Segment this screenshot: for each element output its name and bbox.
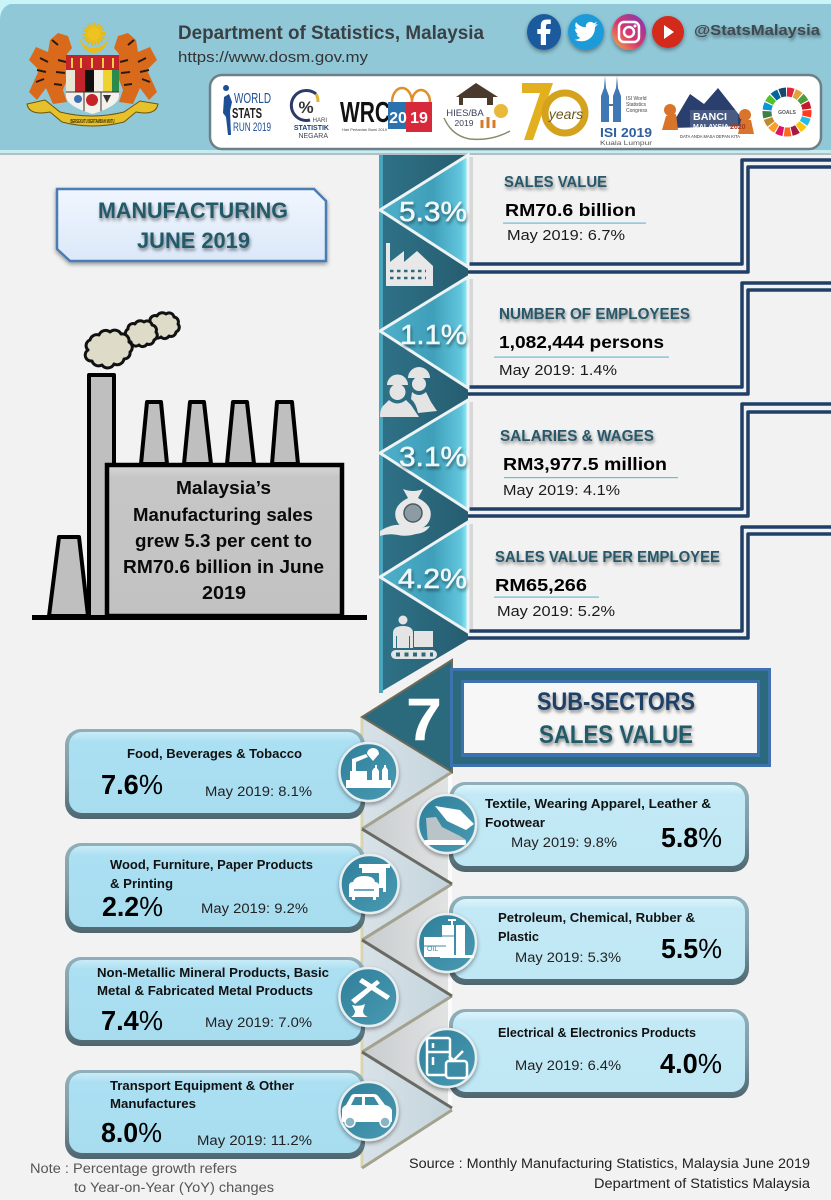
card: food, beverages and tobacco bbox=[65, 729, 365, 819]
icon: fridge and television bbox=[418, 1029, 476, 1087]
icon: star and crescent bbox=[79, 25, 109, 53]
icon: youtube bbox=[652, 16, 684, 48]
card: transport equipment and other manufactures: May 2019: 11.2% bbox=[197, 1133, 312, 1148]
logo: isi 2019: Congress bbox=[626, 108, 648, 114]
card: petroleum, chemical, rubber and plastic: Petroleum, Chemical, Rubber & bbox=[498, 911, 695, 925]
note: Note : Percentage growth refers bbox=[30, 1161, 237, 1176]
card: wood, furniture, paper products and printing: May 2019: 9.2% bbox=[201, 901, 308, 916]
card: non-metallic mineral and metal products: Non-Metallic Mineral Products, Basic bbox=[97, 966, 329, 980]
panel: factory building with summary bbox=[107, 465, 342, 616]
logo: world stats run: STATS bbox=[232, 105, 262, 122]
logo: isi 2019: Kuala Lumpur bbox=[600, 141, 652, 147]
icon: left tiger bbox=[29, 33, 72, 104]
indicator: sales value: RM70.6 billion bbox=[505, 200, 636, 220]
logo: hies/ba 2019 bbox=[444, 83, 510, 139]
card: wood, furniture, paper products and printing: & Printing bbox=[110, 877, 173, 891]
indicator: sales value: SALES VALUE bbox=[504, 174, 607, 191]
note bbox=[30, 1161, 274, 1195]
indicator: sales value: May 2019: 6.7% bbox=[507, 228, 625, 244]
value: 3.1%: 3.1% bbox=[399, 441, 467, 472]
icon: sneakers bbox=[418, 795, 476, 853]
icon: instagram bbox=[612, 14, 646, 50]
card: transport equipment and other manufactures: Manufactures bbox=[110, 1097, 196, 1111]
icon: money bag in hand bbox=[380, 489, 431, 536]
ground line bbox=[32, 615, 367, 620]
card: textile, wearing apparel, leather and footwear bbox=[449, 782, 749, 872]
card: non-metallic mineral and metal products bbox=[65, 957, 365, 1046]
logo: hies/ba 2019: 2019 bbox=[455, 118, 474, 128]
indicator: sales value bbox=[503, 174, 646, 244]
icon: car bbox=[340, 1082, 398, 1140]
logo: banci malaysia 2020: MALAYSIA bbox=[693, 124, 729, 131]
title: manufacturing june 2019 bbox=[57, 189, 326, 261]
ribbon: key indicators bbox=[379, 155, 473, 716]
panel: partner logos bbox=[210, 75, 821, 149]
logo: hari statistik negara: STATISTIK bbox=[294, 125, 329, 132]
chimneys bbox=[49, 375, 298, 617]
card: electrical and electronics products: Electrical & Electronics Products bbox=[498, 1026, 696, 1040]
logo: banci malaysia 2020 bbox=[662, 88, 754, 139]
social handle: @StatsMalaysia bbox=[694, 22, 821, 39]
logo: banci malaysia 2020: DATA ANDA MASA DEPAN KITA bbox=[680, 134, 740, 139]
icon: metal products bbox=[340, 968, 398, 1026]
ribbon facet: employees bbox=[380, 277, 468, 388]
card: wood, furniture, paper products and printing bbox=[65, 843, 365, 933]
icon: furniture bbox=[340, 855, 398, 913]
value: 5.3%: 5.3% bbox=[399, 196, 467, 227]
ribbon facet: sales per employee bbox=[380, 522, 468, 632]
logo: isi 2019: Statistics bbox=[626, 102, 647, 108]
indicator: salaries and wages: May 2019: 4.1% bbox=[503, 483, 620, 499]
ribbon facet: salaries bbox=[380, 400, 468, 510]
icon: motto scroll: BERSEKUTU BERTAMBAH MUTU bbox=[70, 119, 115, 125]
value: 4.2%: 4.2% bbox=[398, 563, 467, 594]
card: electrical and electronics products: May 2019: 6.4% bbox=[515, 1058, 621, 1073]
icon: national coat of arms bbox=[27, 25, 158, 126]
card: petroleum, chemical, rubber and plastic bbox=[449, 896, 749, 985]
summary text: RM70.6 billion in June bbox=[123, 556, 324, 577]
shadows beside ribbon bbox=[468, 157, 473, 629]
card: transport equipment and other manufactures: 8.0% bbox=[101, 1117, 162, 1148]
logo: hies/ba 2019: HIES/BA bbox=[446, 108, 484, 119]
note: to Year-on-Year (YoY) changes bbox=[74, 1180, 274, 1195]
source: Department of Statistics Malaysia bbox=[594, 1176, 811, 1191]
logo: world stats run bbox=[223, 85, 271, 135]
logo: wrc 2019 bbox=[340, 88, 432, 132]
icon: oil barrels: OIL bbox=[427, 946, 438, 953]
source bbox=[409, 1156, 811, 1191]
indicator: sales value per employee: RM65,266 bbox=[495, 575, 587, 595]
lower zigzag ribbon bbox=[362, 717, 452, 1168]
logo: 70 years: years bbox=[548, 106, 583, 122]
card: petroleum, chemical, rubber and plastic: May 2019: 5.3% bbox=[515, 950, 621, 965]
icon: factory bbox=[386, 243, 433, 286]
card: non-metallic mineral and metal products: Metal & Fabricated Metal Products bbox=[97, 984, 313, 998]
logo: world stats run: RUN 2019 bbox=[233, 120, 271, 134]
indicator: number of employees: 1,082,444 persons bbox=[499, 332, 664, 352]
panel: sub-sectors sales value heading bbox=[450, 668, 771, 767]
summary text: grew 5.3 per cent to bbox=[135, 530, 312, 551]
value: 1.1%: 1.1% bbox=[400, 319, 467, 350]
logo: world stats run: WORLD bbox=[234, 90, 271, 107]
card: textile, wearing apparel, leather and footwear: Textile, Wearing Apparel, Leather & bbox=[485, 797, 711, 811]
logo: banci malaysia 2020: 2020 bbox=[730, 124, 746, 131]
logo: wrc 2019: 19 bbox=[410, 110, 428, 127]
ribbon gap under last segment bbox=[379, 640, 468, 716]
logo: hari statistik negara: % bbox=[298, 98, 314, 117]
connector lines bbox=[468, 160, 831, 638]
logo: wrc 2019: 20 bbox=[389, 110, 407, 127]
logo: 70 years bbox=[522, 83, 585, 140]
card: non-metallic mineral and metal products: May 2019: 7.0% bbox=[205, 1015, 312, 1030]
indicator: number of employees bbox=[494, 306, 690, 379]
card: electrical and electronics products bbox=[449, 1009, 749, 1098]
seven sub-sectors badge bbox=[362, 660, 452, 772]
title: manufacturing june 2019: JUNE 2019 bbox=[137, 228, 250, 253]
logo: hari statistik negara: NEGARA bbox=[298, 133, 328, 140]
icon: food production bbox=[340, 743, 398, 801]
factory illustration bbox=[32, 313, 367, 620]
header band bbox=[0, 0, 831, 155]
card: petroleum, chemical, rubber and plastic: 5.5% bbox=[661, 933, 722, 964]
card: food, beverages and tobacco: May 2019: 8.1% bbox=[205, 784, 312, 799]
card: textile, wearing apparel, leather and footwear: May 2019: 9.8% bbox=[511, 835, 617, 850]
indicator: sales value per employee bbox=[494, 549, 720, 620]
logo: isi 2019: ISI World bbox=[626, 96, 647, 102]
summary text: 2019 bbox=[202, 582, 246, 603]
logo: hari statistik negara: HARI bbox=[313, 118, 327, 124]
logo: isi 2019: ISI 2019 bbox=[600, 125, 652, 140]
summary text bbox=[123, 477, 324, 603]
summary text: Manufacturing sales bbox=[133, 504, 313, 525]
logo: hari statistik negara bbox=[291, 90, 329, 140]
indicator: salaries and wages: SALARIES & WAGES bbox=[500, 428, 654, 445]
logo: wrc 2019: Hari Pertanian Bumi 2019 bbox=[342, 127, 388, 132]
website url: https://www.dosm.gov.my bbox=[178, 49, 369, 66]
logo: sustainable development goals wheel bbox=[767, 92, 807, 132]
logo: banci malaysia 2020: BANCI bbox=[693, 112, 727, 123]
header title: Department of Statistics, Malaysia bbox=[178, 23, 484, 44]
card: textile, wearing apparel, leather and footwear: 5.8% bbox=[661, 822, 722, 853]
title: manufacturing june 2019: MANUFACTURING bbox=[98, 198, 288, 223]
icon: oil barrels bbox=[418, 914, 476, 972]
card: transport equipment and other manufactures bbox=[65, 1070, 365, 1159]
card: food, beverages and tobacco: Food, Beverages & Tobacco bbox=[127, 747, 302, 761]
source: Source : Monthly Manufacturing Statistics, Malaysia June 2019 bbox=[409, 1156, 810, 1171]
panel: sub-sectors sales value heading: SALES VALUE bbox=[539, 721, 693, 749]
icon: workers bbox=[380, 367, 437, 417]
icon: worker with conveyor bbox=[391, 616, 437, 659]
logo: isi 2019 bbox=[600, 76, 652, 147]
icon: facebook bbox=[527, 14, 561, 50]
ribbon facet: sales value bbox=[380, 155, 468, 267]
indicator: sales value per employee: SALES VALUE PER EMPLOYEE bbox=[495, 549, 720, 566]
smoke clouds bbox=[85, 313, 179, 368]
seven sub-sectors badge: 7 bbox=[406, 686, 442, 753]
icon: right tiger bbox=[114, 33, 157, 104]
card: textile, wearing apparel, leather and footwear: Footwear bbox=[485, 816, 545, 830]
indicator: number of employees: NUMBER OF EMPLOYEES bbox=[499, 306, 690, 323]
indicator: salaries and wages bbox=[500, 428, 678, 499]
card: food, beverages and tobacco: 7.6% bbox=[101, 769, 163, 800]
logo: sdg caption: GOALS bbox=[778, 110, 797, 116]
indicator: sales value per employee: May 2019: 5.2% bbox=[497, 604, 615, 620]
summary text: Malaysia’s bbox=[176, 477, 271, 498]
logo: wrc 2019: WRC bbox=[340, 97, 390, 129]
card: transport equipment and other manufactures: Transport Equipment & Other bbox=[110, 1079, 294, 1093]
card: wood, furniture, paper products and printing: 2.2% bbox=[102, 891, 163, 922]
card: petroleum, chemical, rubber and plastic: Plastic bbox=[498, 930, 539, 944]
card: wood, furniture, paper products and printing: Wood, Furniture, Paper Products bbox=[110, 858, 313, 872]
icon: twitter bbox=[568, 14, 604, 50]
indicator: number of employees: May 2019: 1.4% bbox=[499, 363, 617, 379]
indicator: salaries and wages: RM3,977.5 million bbox=[503, 454, 667, 474]
card: non-metallic mineral and metal products: 7.4% bbox=[101, 1005, 163, 1036]
panel: sub-sectors sales value heading: SUB-SECTORS bbox=[537, 688, 695, 716]
icon: shield bbox=[66, 55, 119, 116]
card: electrical and electronics products: 4.0% bbox=[660, 1048, 722, 1079]
